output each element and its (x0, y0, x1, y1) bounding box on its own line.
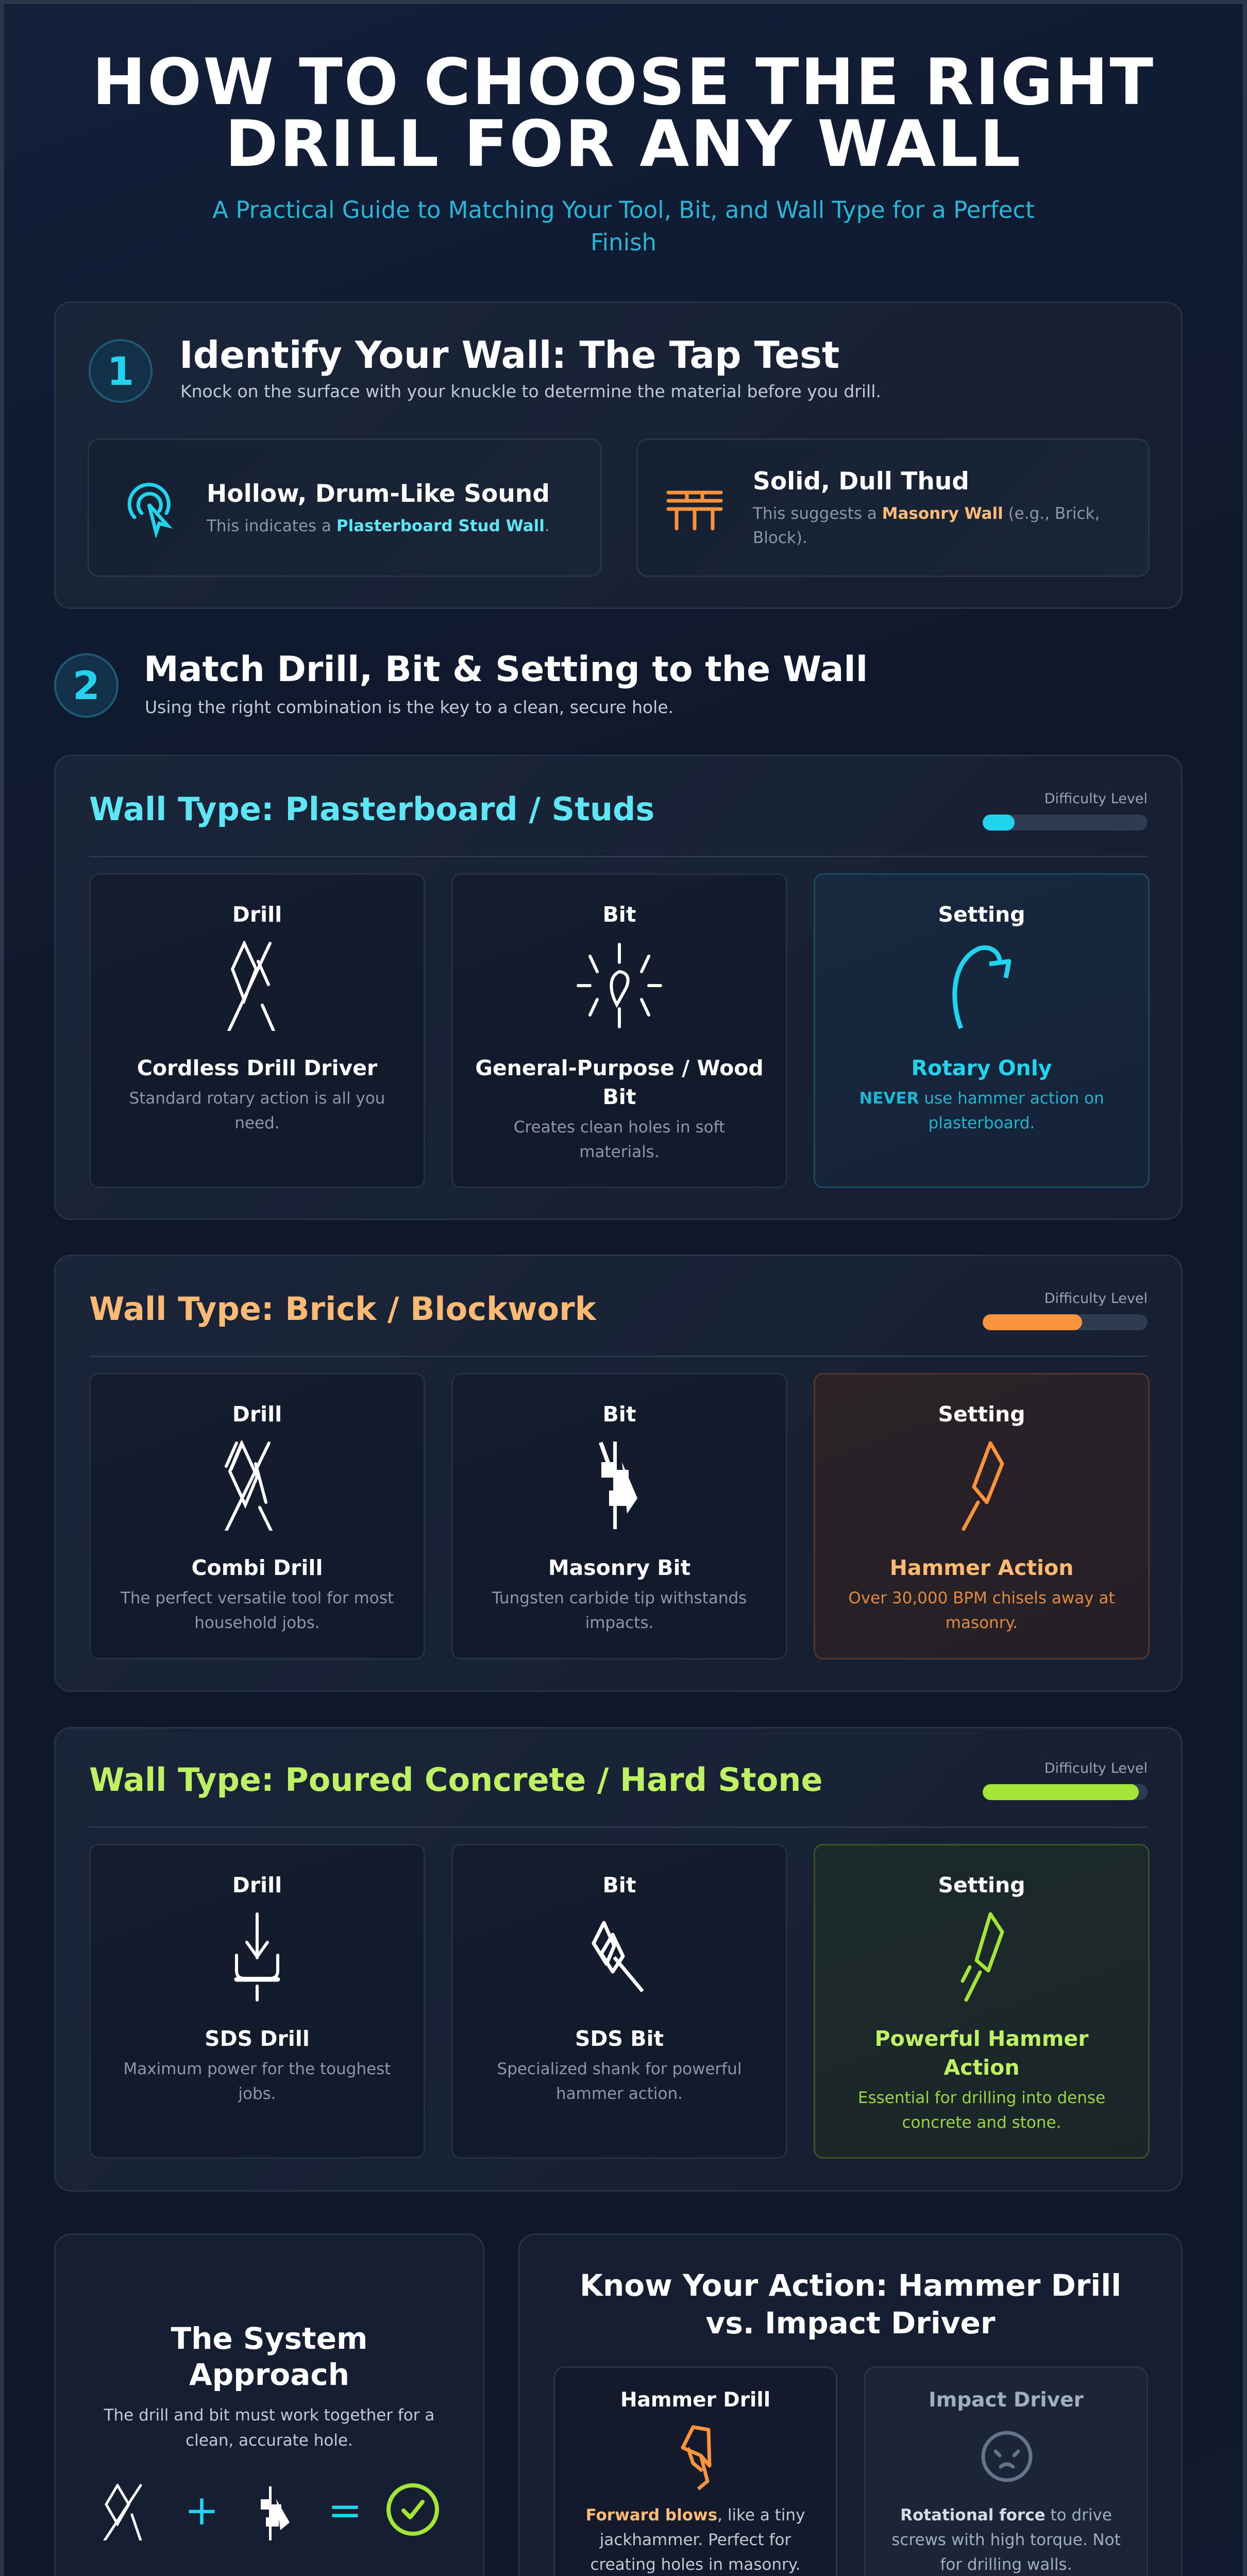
text: tap test instruction: Knock on the surface with your knuckle to determine the material before you drill. (180, 381, 881, 401)
icon: plus: + (184, 2486, 219, 2534)
panel: concrete (54, 1727, 1183, 2192)
icon: drill (227, 941, 275, 1031)
card: drill: Cordless Drill Driver (137, 1056, 377, 1080)
icon: hammer action (962, 1442, 1004, 1531)
card: drill: Drill (232, 902, 282, 927)
card: bit: General-Purpose / Wood (475, 1056, 764, 1080)
card: setting rotary: Rotary Only (911, 1056, 1052, 1080)
icon: combi drill (225, 1440, 273, 1531)
step number 1 (89, 339, 153, 403)
row: plasterboard tools (89, 873, 1150, 1188)
panel: hammer vs impact (518, 2233, 1183, 2576)
icon: rotary arrow (952, 945, 1011, 1029)
text: impact desc: Rotational force to drive (900, 2506, 1112, 2524)
heading: know your action: Know Your Action: Hammer Drill (580, 2268, 1121, 2303)
desc: masonry: This suggests a Masonry Wall (e.g., Brick, (753, 504, 1100, 523)
label: impact driver: Impact Driver (929, 2388, 1084, 2412)
card: sds bit (451, 1844, 787, 2159)
desc: plasterboard: This indicates a Plasterboard Stud Wall. (207, 517, 550, 535)
step number 2 (54, 653, 119, 718)
card: sds bit: Specialized shank for powerful (497, 2060, 742, 2078)
icon: drill small (102, 2484, 159, 2540)
text: impact desc: for drilling walls. (940, 2555, 1072, 2574)
card: drill (89, 873, 425, 1188)
card: sds bit: hammer action. (556, 2084, 683, 2103)
heading: identify your wall: Identify Your Wall: The Tap Test (179, 333, 839, 377)
card: setting powerful hammer: concrete and stone. (902, 2113, 1061, 2132)
title: hollow: Hollow, Drum-Like Sound (207, 480, 550, 508)
card: setting powerful hammer: Setting (938, 1873, 1025, 1897)
heading: brick: Wall Type: Brick / Blockwork (89, 1290, 596, 1328)
card: masonry bit: Masonry Bit (548, 1555, 690, 1580)
icon: tap pointer (128, 483, 173, 538)
card: setting hammer: Over 30,000 BPM chisels away at (848, 1589, 1115, 1607)
card: setting powerful hammer: Essential for drilling into dense (858, 2089, 1105, 2107)
card: sds drill: jobs. (238, 2084, 276, 2103)
card: bit: materials. (579, 1143, 660, 1161)
panel: plasterboard (54, 755, 1183, 1220)
icon: bit sun (577, 943, 662, 1028)
heading: know your action (520, 2267, 1181, 2342)
card: sds drill (89, 1844, 425, 2159)
sub-card: impact driver (864, 2366, 1148, 2576)
icon: powerful hammer (960, 1912, 1004, 2002)
title: HOW TO CHOOSE THE RIGHT (92, 45, 1155, 120)
card: drill: need. (234, 1114, 280, 1132)
card: setting rotary (814, 873, 1150, 1188)
card: combi drill (89, 1373, 425, 1659)
card: sds drill: Drill (232, 1873, 282, 1897)
card: bit: Creates clean holes in soft (514, 1118, 725, 1137)
heading: system approach: The System (171, 2321, 367, 2356)
difficulty bar high: Difficulty Level (1044, 1760, 1148, 1776)
difficulty bar low: Difficulty Level (1044, 791, 1148, 807)
icon: sds drill (234, 1912, 280, 2002)
card: setting hammer (814, 1373, 1150, 1659)
heading: system approach (171, 2321, 367, 2392)
sub-card: hammer drill (553, 2366, 837, 2576)
card: setting rotary: Setting (938, 902, 1025, 927)
label: hammer drill: Hammer Drill (620, 2388, 770, 2412)
panel: step 1 tap test (54, 301, 1183, 609)
card: setting powerful hammer (814, 1844, 1150, 2159)
heading: plasterboard: Wall Type: Plasterboard / Studs (89, 790, 654, 828)
card: sds drill: Maximum power for the toughest (124, 2060, 391, 2078)
row: brick tools (89, 1373, 1150, 1659)
card: masonry bit: Bit (603, 1402, 636, 1427)
icon: jackhammer (678, 2425, 714, 2492)
step number 1: 1 (107, 348, 134, 394)
desc: masonry: Block). (753, 529, 807, 547)
card: combi drill: Drill (232, 1402, 282, 1427)
heading: know your action: vs. Impact Driver (706, 2306, 995, 2341)
difficulty bar high (983, 1760, 1148, 1800)
card: setting hammer: masonry. (946, 1614, 1018, 1632)
text: hammer desc: jackhammer. Perfect for (600, 2531, 791, 2549)
desc: masonry (752, 504, 1100, 547)
sub-card: solid thud (636, 438, 1150, 577)
card: combi drill: Combi Drill (191, 1555, 323, 1580)
card: setting powerful hammer: Action (943, 2055, 1020, 2080)
title: DRILL FOR ANY WALL (225, 107, 1022, 181)
card: combi drill: household jobs. (194, 1614, 320, 1632)
card: bit: Bit (603, 902, 636, 927)
title: solid: Solid, Dull Thud (753, 467, 969, 496)
text: impact desc: screws with high torque. Not (891, 2531, 1121, 2549)
card: masonry bit (451, 1373, 787, 1659)
card: sds bit: SDS Bit (575, 2026, 664, 2051)
card: masonry bit: impacts. (585, 1614, 653, 1632)
equation: drill + bit = check (56, 2481, 483, 2540)
icon: impact face (980, 2430, 1034, 2483)
difficulty bar low (983, 791, 1148, 831)
text: system desc: clean, accurate hole. (186, 2431, 353, 2450)
card: setting powerful hammer: Powerful Hammer (875, 2026, 1088, 2051)
text: impact desc (876, 2503, 1136, 2576)
panel: system approach (54, 2233, 484, 2576)
subtitle: Finish (591, 229, 656, 256)
icon: sds bit (592, 1921, 644, 1992)
heading: system approach: Approach (189, 2357, 349, 2392)
row: concrete tools (89, 1844, 1150, 2159)
panel: brick (54, 1255, 1183, 1692)
card: masonry bit: Tungsten carbide tip withstands (492, 1589, 747, 1607)
sub-card: hollow sound (88, 438, 602, 577)
icon: bit small (260, 2486, 291, 2540)
title (92, 45, 1155, 181)
text: hammer desc: Forward blows, like a tiny (586, 2506, 805, 2524)
icon: equals: = (328, 2486, 362, 2534)
card: setting hammer: Setting (938, 1402, 1025, 1427)
card: setting rotary: plasterboard. (929, 1114, 1035, 1132)
text: hammer desc (565, 2503, 825, 2576)
card: combi drill: The perfect versatile tool for most (121, 1589, 394, 1607)
heading: concrete: Wall Type: Poured Concrete / Hard Stone (89, 1761, 822, 1799)
icon: masonry bit (599, 1442, 637, 1529)
card: setting rotary: NEVER use hammer action on (859, 1089, 1104, 1108)
subtitle (212, 196, 1035, 256)
card: sds drill: SDS Drill (205, 2026, 310, 2051)
text: system desc (104, 2406, 434, 2450)
card: bit (451, 873, 787, 1188)
text: hammer desc: creating holes in masonry. (590, 2555, 801, 2574)
card: drill: Standard rotary action is all you (129, 1089, 385, 1108)
step number 2: 2 (73, 663, 100, 708)
heading: match drill: Match Drill, Bit & Setting to the Wall (144, 649, 868, 690)
text: system desc: The drill and bit must work together for a (104, 2406, 434, 2425)
card: bit: Bit (603, 1084, 636, 1109)
text: step 2 subtitle: Using the right combination is the key to a clean, secure hole. (145, 697, 673, 717)
card: sds bit: Bit (603, 1873, 636, 1897)
icon: brick wall (667, 490, 722, 531)
difficulty bar medium (983, 1291, 1148, 1330)
icon: check circle (385, 2482, 440, 2537)
subtitle: A Practical Guide to Matching Your Tool, Bit, and Wall Type for a Perfect (212, 196, 1035, 224)
card: setting hammer: Hammer Action (890, 1555, 1073, 1580)
difficulty bar medium: Difficulty Level (1044, 1291, 1148, 1307)
